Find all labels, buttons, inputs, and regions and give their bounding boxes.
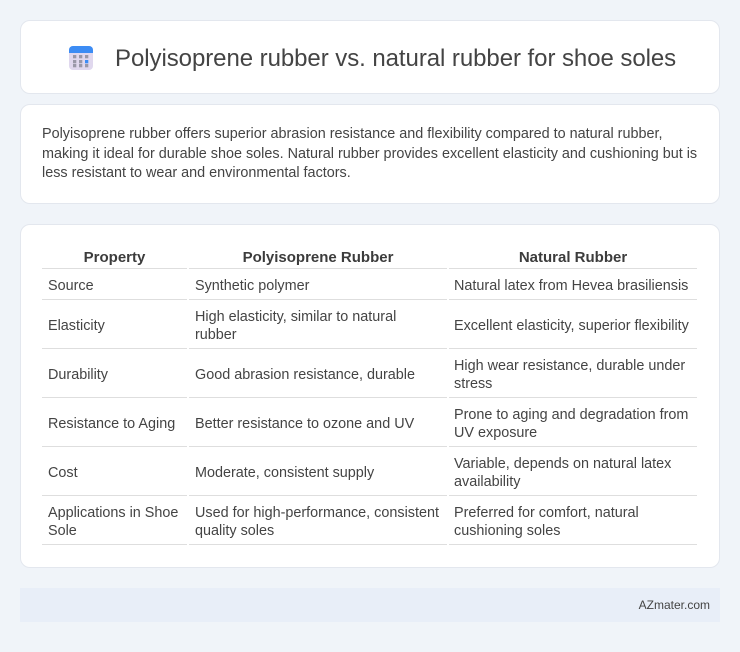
footer credit: AZmater.com <box>639 598 710 612</box>
row: applications in shoe sole: Sole <box>48 523 77 539</box>
row: elasticity: High elasticity, similar to natural <box>195 309 396 325</box>
intro text <box>42 126 697 181</box>
column heading: property: Property <box>84 249 145 266</box>
row: durability: Durability <box>48 367 108 383</box>
row: source <box>48 278 688 294</box>
row: elasticity: Excellent elasticity, superior flexibility <box>454 318 689 334</box>
row: source: Synthetic polymer <box>195 278 309 294</box>
intro text: less resistant to wear and environmental factors. <box>42 165 351 181</box>
table panel <box>20 224 720 568</box>
header panel <box>20 20 720 94</box>
row: elasticity <box>48 309 689 343</box>
title: Polyisoprene rubber vs. natural rubber for shoe soles <box>115 45 676 72</box>
row: applications in shoe sole: Applications in Shoe <box>48 505 178 521</box>
row: durability: High wear resistance, durable under <box>454 358 685 374</box>
intro text: Polyisoprene rubber offers superior abrasion resistance and flexibility compared to natural rubber, <box>42 126 662 142</box>
row: durability: Good abrasion resistance, durable <box>195 367 415 383</box>
row: cost <box>48 456 672 490</box>
row: applications in shoe sole: Used for high-performance, consistent <box>195 505 439 521</box>
row: cost: Variable, depends on natural latex <box>454 456 671 472</box>
row: durability: stress <box>454 376 492 392</box>
intro panel <box>20 104 720 204</box>
row: cost: availability <box>454 474 520 490</box>
row: elasticity: rubber <box>195 327 237 343</box>
row: applications in shoe sole: Preferred for comfort, natural <box>454 505 639 521</box>
row: applications in shoe sole: quality soles <box>195 523 274 539</box>
row: cost: Moderate, consistent supply <box>195 465 374 481</box>
row: resistance to aging: Prone to aging and degradation from <box>454 407 688 423</box>
row: durability <box>48 358 685 392</box>
row: applications in shoe sole <box>48 505 639 539</box>
row: cost: Cost <box>48 465 78 481</box>
icon: calendar grid <box>69 46 93 70</box>
row: elasticity: Elasticity <box>48 318 105 334</box>
row: resistance to aging: Better resistance to ozone and UV <box>195 416 414 432</box>
intro text: making it ideal for durable shoe soles. Natural rubber provides excellent elasticity and cushioning but is <box>42 146 697 162</box>
column heading: natural rubber: Natural Rubber <box>519 249 627 266</box>
column heading: polyisoprene rubber: Polyisoprene Rubber <box>243 249 393 266</box>
row: applications in shoe sole: cushioning soles <box>454 523 560 539</box>
row: source: Natural latex from Hevea brasiliensis <box>454 278 688 294</box>
row: resistance to aging: UV exposure <box>454 425 537 441</box>
row: resistance to aging <box>48 407 688 441</box>
row: source: Source <box>48 278 94 294</box>
footer bar <box>20 588 720 622</box>
row: resistance to aging: Resistance to Aging <box>48 416 175 432</box>
